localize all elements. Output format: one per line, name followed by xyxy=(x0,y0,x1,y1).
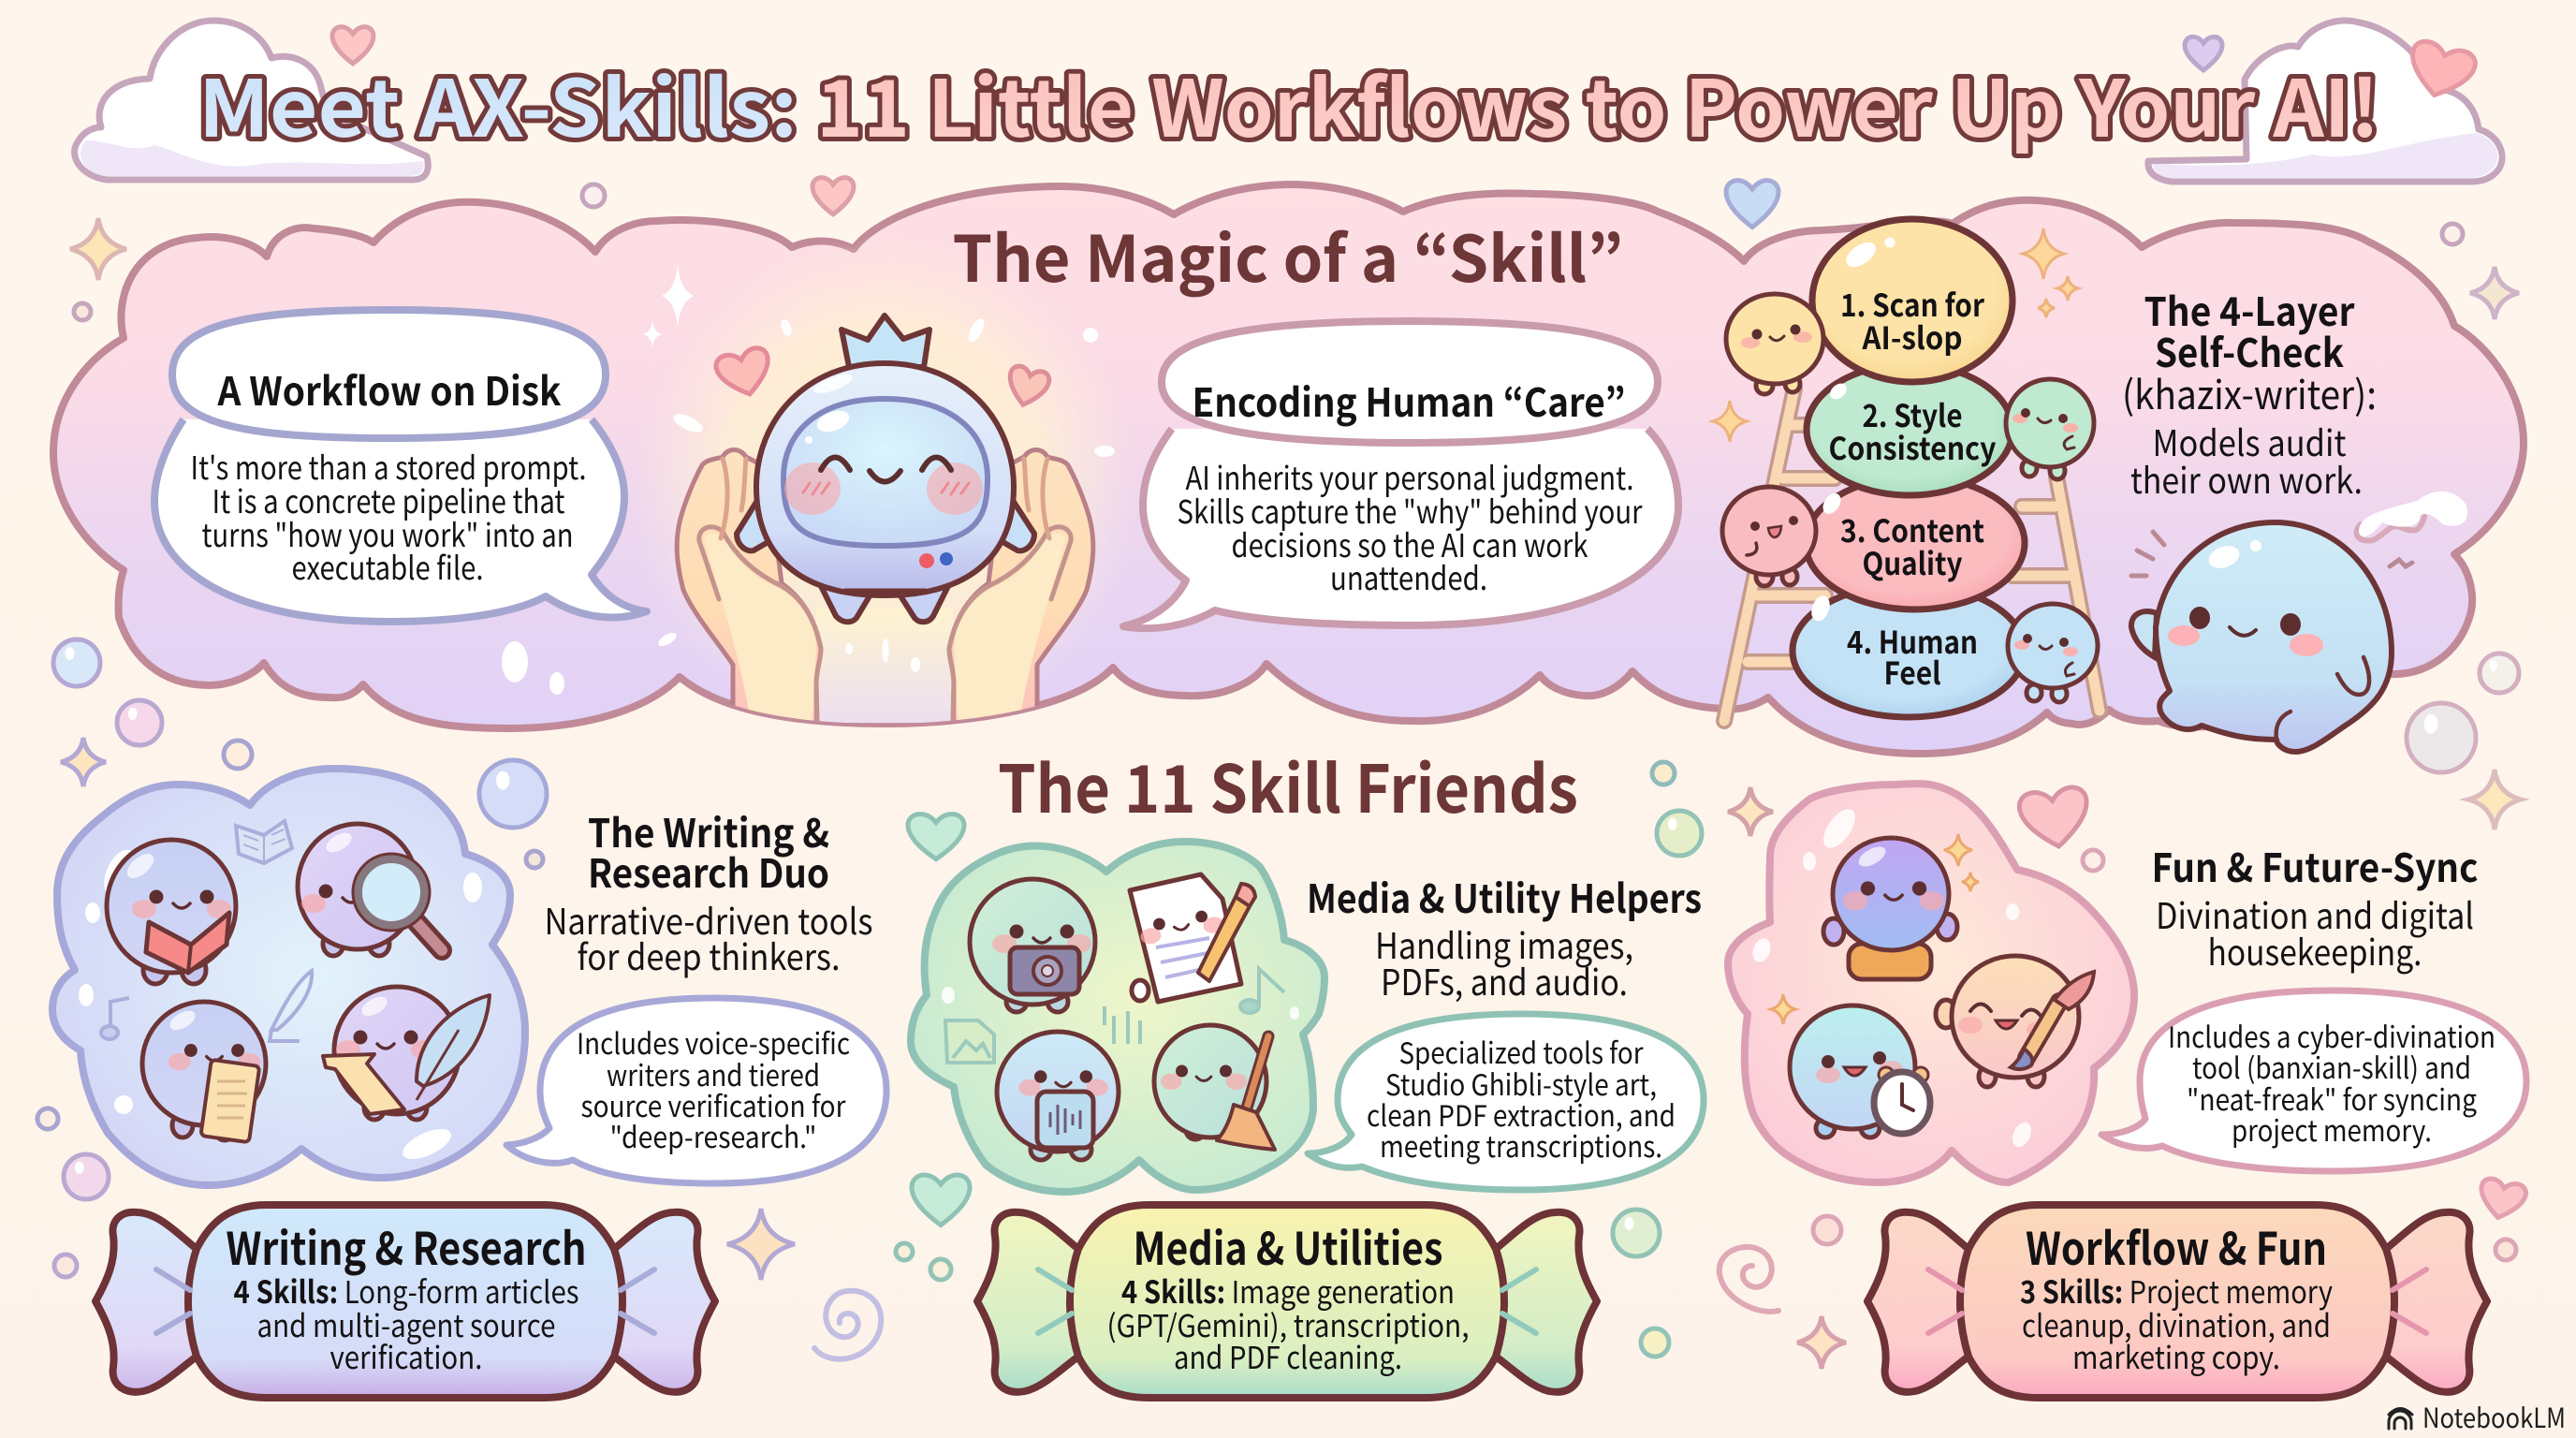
big blue character xyxy=(2131,522,2412,752)
layer 1: Scan for AI-slop: AI-slop xyxy=(1862,314,1962,359)
text: writing and research duo: The Writing & xyxy=(588,802,829,859)
layer 3: Content Quality: Quality xyxy=(1863,539,1963,584)
text: fun and future-sync: Fun & Future-Sync xyxy=(2151,837,2479,894)
candy: writing and research: verification. xyxy=(329,1333,483,1378)
cloud: top left xyxy=(75,21,428,180)
text: Encoding Human Care: AI inherits your personal judgment. xyxy=(1185,453,1634,499)
candy: media and utilities: (GPT/Gemini), transcription, xyxy=(1106,1301,1470,1346)
heading: The 11 Skill Friends: The 11 Skill Friends xyxy=(998,738,1578,832)
candy: media and utilities: and PDF cleaning. xyxy=(1174,1333,1402,1378)
text: A Workflow on Disk: turns "how you work" into an xyxy=(202,510,573,556)
character: document with pencil xyxy=(1130,874,1255,1002)
speech bubble: writing xyxy=(506,998,886,1183)
speech bubble: fun: project memory. xyxy=(2232,1108,2432,1150)
sparkles in fun panel xyxy=(1771,834,1979,1024)
layer 4: Human Feel xyxy=(1793,584,2025,717)
text: Encoding Human Care: decisions so the AI can work xyxy=(1232,521,1588,566)
candy: writing and research: 4 Skills: Long-form articles xyxy=(234,1268,578,1313)
title: 11 Little Workflows to Power Up Your AI! xyxy=(816,47,2379,160)
gloss highlights xyxy=(1749,803,2035,1150)
text: fun and future-sync: Divination and digital xyxy=(2156,888,2474,939)
text: writing and research duo xyxy=(545,802,872,980)
character: camera xyxy=(970,879,1095,1012)
panel: writing and research xyxy=(52,769,525,1185)
speech bubble: media xyxy=(1308,1014,1704,1190)
character: paintbrush xyxy=(1936,956,2094,1087)
layer 3: Content Quality xyxy=(1806,477,2025,609)
bubble header xyxy=(172,310,606,438)
cloud bubble xyxy=(911,842,1325,1192)
speech bubble: media: clean PDF extraction, and xyxy=(1367,1093,1676,1135)
text: media and utility helpers: Handling images, xyxy=(1375,917,1633,969)
cloud background xyxy=(53,184,2524,754)
text: media and utility helpers xyxy=(1307,868,1702,1005)
panel: media and utilities xyxy=(911,842,1325,1192)
text: writing and research duo: for deep thinkers. xyxy=(577,929,841,980)
text: Encoding Human Care: unattended. xyxy=(1330,553,1487,599)
layer 4: Human Feel: 4. Human xyxy=(1847,618,1978,663)
yellow character xyxy=(1726,294,1823,394)
glow behind robot xyxy=(670,244,1099,724)
character: clock xyxy=(1790,1005,1930,1137)
speech bubble: writing: "deep-research." xyxy=(610,1114,816,1156)
text: Encoding Human Care: Encoding Human “Care” xyxy=(1193,372,1625,429)
text: A Workflow on Disk: It's more than a stored prompt. xyxy=(191,443,586,489)
small characters on ladder xyxy=(1722,294,2098,702)
candy: workflow and fun: marketing copy. xyxy=(2072,1333,2280,1378)
blue character xyxy=(2008,604,2098,702)
robot mascot xyxy=(502,264,1115,695)
text: fun and future-sync xyxy=(2151,837,2479,976)
sparkles near ladder xyxy=(1713,228,2078,442)
bubble body xyxy=(154,419,647,622)
candy: writing and research xyxy=(95,1205,715,1398)
title: Meet AX-Skills: xyxy=(198,47,798,160)
candy: workflow and fun xyxy=(1867,1205,2487,1398)
text: fun and future-sync: housekeeping. xyxy=(2207,924,2422,976)
layer 4: Human Feel: Feel xyxy=(1883,649,1941,694)
speech bubble: media: Specialized tools for xyxy=(1398,1030,1644,1072)
layer 2: Style Consistency xyxy=(1807,364,2012,495)
text: media and utility helpers: PDFs, and audio. xyxy=(1381,954,1628,1005)
candy: writing and research: Writing & Research xyxy=(227,1212,586,1278)
text: A Workflow on Disk: executable file. xyxy=(292,543,483,589)
icons: image, note, waveform xyxy=(945,969,1284,1063)
layer 1: Scan for AI-slop: 1. Scan for xyxy=(1840,281,1985,326)
layer 2: Style Consistency: Consistency xyxy=(1829,424,1997,469)
layer 2: Style Consistency: 2. Style xyxy=(1863,391,1962,436)
speech bubble: fun: "neat-freak" for syncing xyxy=(2187,1077,2477,1119)
speech bubble: A Workflow on Disk xyxy=(154,310,647,622)
green character xyxy=(2006,379,2094,479)
text: media and utility helpers: Media & Utility Helpers xyxy=(1307,868,1702,925)
text: writing and research duo: Research Duo xyxy=(588,843,829,900)
speech bubble: writing: source verification for xyxy=(580,1083,846,1125)
stack: 4-layer self-check xyxy=(1793,219,2025,717)
text: writing and research duo: Narrative-driven tools xyxy=(545,893,872,945)
heading: The Magic of a “Skill” xyxy=(953,208,1623,301)
speech bubble: media: meeting transcriptions. xyxy=(1380,1123,1662,1166)
speech bubble: fun: Includes a cyber-divination xyxy=(2168,1014,2496,1056)
candy: workflow and fun: Workflow & Fun xyxy=(2026,1212,2327,1278)
text: A Workflow on Disk: It is a concrete pipeline that xyxy=(212,477,565,522)
speech bubble: writing: writers and tiered xyxy=(607,1052,820,1094)
text: 4-layer self-check: (khazix-writer): xyxy=(2122,364,2377,421)
gloss highlights xyxy=(942,882,1299,1020)
speech bubble: Encoding Human Care xyxy=(1123,321,1678,628)
speech bubble: fun xyxy=(2101,990,2526,1171)
candy: workflow and fun: 3 Skills: Project memory xyxy=(2020,1268,2333,1313)
text: 4-layer self-check: Models audit xyxy=(2153,415,2346,466)
text: Encoding Human Care xyxy=(1178,372,1643,599)
ladder xyxy=(1724,389,2100,721)
layer 3: Content Quality: 3. Content xyxy=(1840,506,1984,551)
character: scroll reader xyxy=(142,1002,266,1142)
cloud bubble xyxy=(52,769,525,1185)
pink character xyxy=(1722,487,1816,586)
panel: fun and future-sync xyxy=(1728,784,2134,1182)
candy: workflow and fun: cleanup, divination, and xyxy=(2022,1301,2331,1346)
speech bubble: writing: Includes voice-specific xyxy=(577,1020,850,1063)
text: Encoding Human Care: Skills capture the "why" behind your xyxy=(1178,487,1643,533)
bubble header xyxy=(1162,321,1658,443)
text: 4-layer self-check: Self-Check xyxy=(2155,322,2345,379)
gloss highlights xyxy=(79,845,482,1166)
bubble body xyxy=(1123,429,1678,628)
right hand xyxy=(949,449,1093,740)
speech bubble: fun: tool (banxian-skill) and xyxy=(2192,1045,2471,1087)
character: broom xyxy=(1154,1025,1275,1150)
text: 4-layer self-check: their own work. xyxy=(2130,452,2363,504)
hands holding robot xyxy=(677,449,1093,740)
cloud bubble xyxy=(1728,784,2134,1182)
left hand xyxy=(677,449,821,740)
character: crystal ball xyxy=(1823,838,1957,979)
white foam accent xyxy=(2357,492,2467,541)
character: quill writer xyxy=(323,987,490,1120)
icons: open book, feather, music note xyxy=(101,821,312,1041)
speech bubble: media: Studio Ghibli-style art, xyxy=(1385,1062,1657,1104)
candy: media and utilities: Media & Utilities xyxy=(1133,1212,1443,1278)
layer 1: Scan for AI-slop xyxy=(1812,219,2012,382)
text: 4-layer self-check xyxy=(2122,281,2377,504)
candy: media and utilities: 4 Skills: Image generation xyxy=(1121,1268,1455,1313)
character: audio tablet xyxy=(997,1032,1119,1160)
candy: writing and research: and multi-agent source xyxy=(256,1301,556,1346)
text: A Workflow on Disk xyxy=(191,360,586,589)
text: A Workflow on Disk: A Workflow on Disk xyxy=(217,360,562,418)
text: 4-layer self-check: The 4-Layer xyxy=(2144,281,2355,338)
candy: media and utilities xyxy=(977,1205,1597,1398)
character: reading xyxy=(107,840,236,984)
character: magnifier xyxy=(298,824,442,956)
cloud: top right xyxy=(2148,21,2502,182)
